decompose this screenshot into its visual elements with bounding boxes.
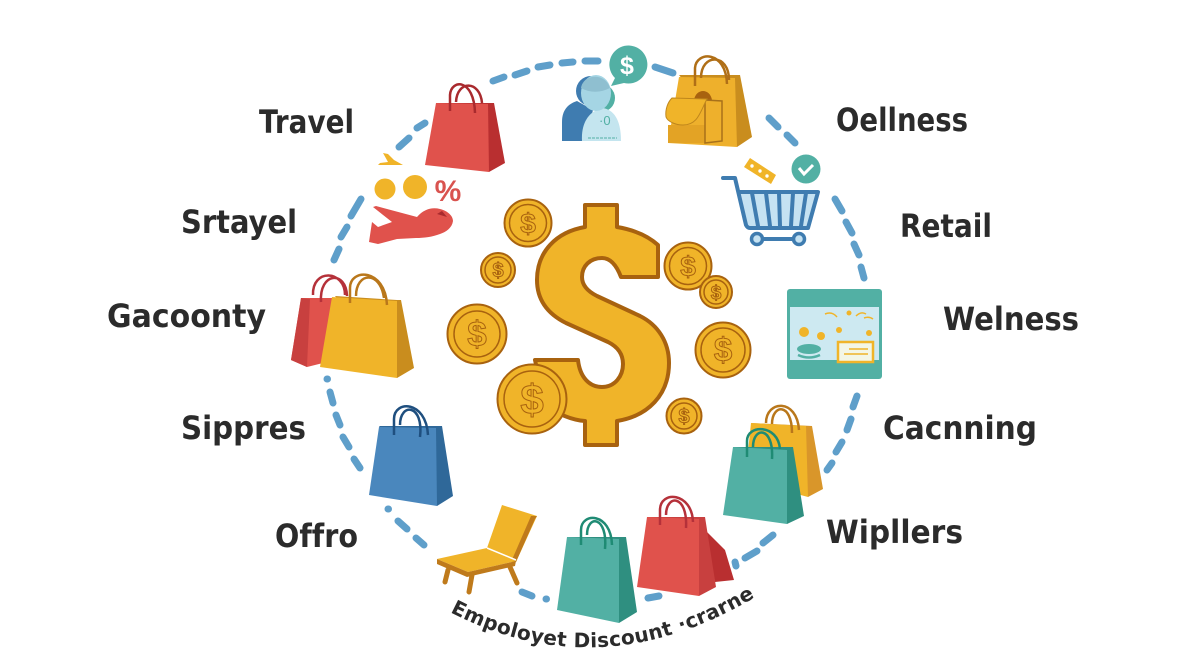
- icon: blue bag: [369, 406, 453, 506]
- label: Sippres: Sippres: [181, 409, 306, 447]
- coins around dollar sign: $: [678, 406, 690, 428]
- icon: customer support person: [562, 75, 621, 141]
- label: Gacoonty: Gacoonty: [107, 297, 266, 335]
- coins around dollar sign: $: [467, 315, 487, 354]
- label: Travel: Travel: [259, 103, 354, 141]
- coins around dollar sign: $: [520, 208, 536, 239]
- label: Oellness: Oellness: [836, 101, 968, 139]
- icon: red bag top: [425, 84, 505, 172]
- icon: customer support person: ·0: [599, 113, 611, 128]
- icon: yellow bag with pouch: [666, 56, 752, 147]
- coins around dollar sign: [448, 200, 750, 434]
- coins around dollar sign: $: [492, 260, 504, 282]
- coins around dollar sign: $: [711, 283, 722, 304]
- curved caption: Empoloyet Discount ·crarne: [452, 590, 754, 648]
- icon: speech bubble with dollar: $: [620, 52, 634, 80]
- label: Srtayel: Srtayel: [181, 203, 297, 241]
- label: Offro: Offro: [275, 517, 358, 555]
- icon: double shopping bags: [291, 275, 414, 378]
- coins around dollar sign: $: [520, 376, 544, 423]
- label: Cacnning: Cacnning: [883, 409, 1037, 447]
- icon: airplane and discount: [369, 153, 461, 244]
- label: Retail: Retail: [900, 207, 992, 245]
- icon: speech bubble with dollar: [609, 46, 647, 86]
- icon: kiosk screen: [787, 289, 882, 379]
- icon: yellow and teal bags right: [723, 406, 823, 524]
- coins around dollar sign: $: [714, 331, 732, 368]
- label: Welness: Welness: [943, 300, 1079, 338]
- icon: chair: [437, 505, 537, 592]
- icon: teal bag bottom: [557, 518, 637, 623]
- coins around dollar sign: $: [680, 251, 696, 282]
- central dollar sign: [535, 205, 669, 445]
- icon: red bag bottom: [637, 497, 734, 596]
- icon: shopping cart: [723, 154, 820, 244]
- dashed ring: [327, 61, 864, 599]
- icon: airplane and discount: %: [435, 175, 461, 208]
- label: Wipllers: Wipllers: [826, 513, 963, 551]
